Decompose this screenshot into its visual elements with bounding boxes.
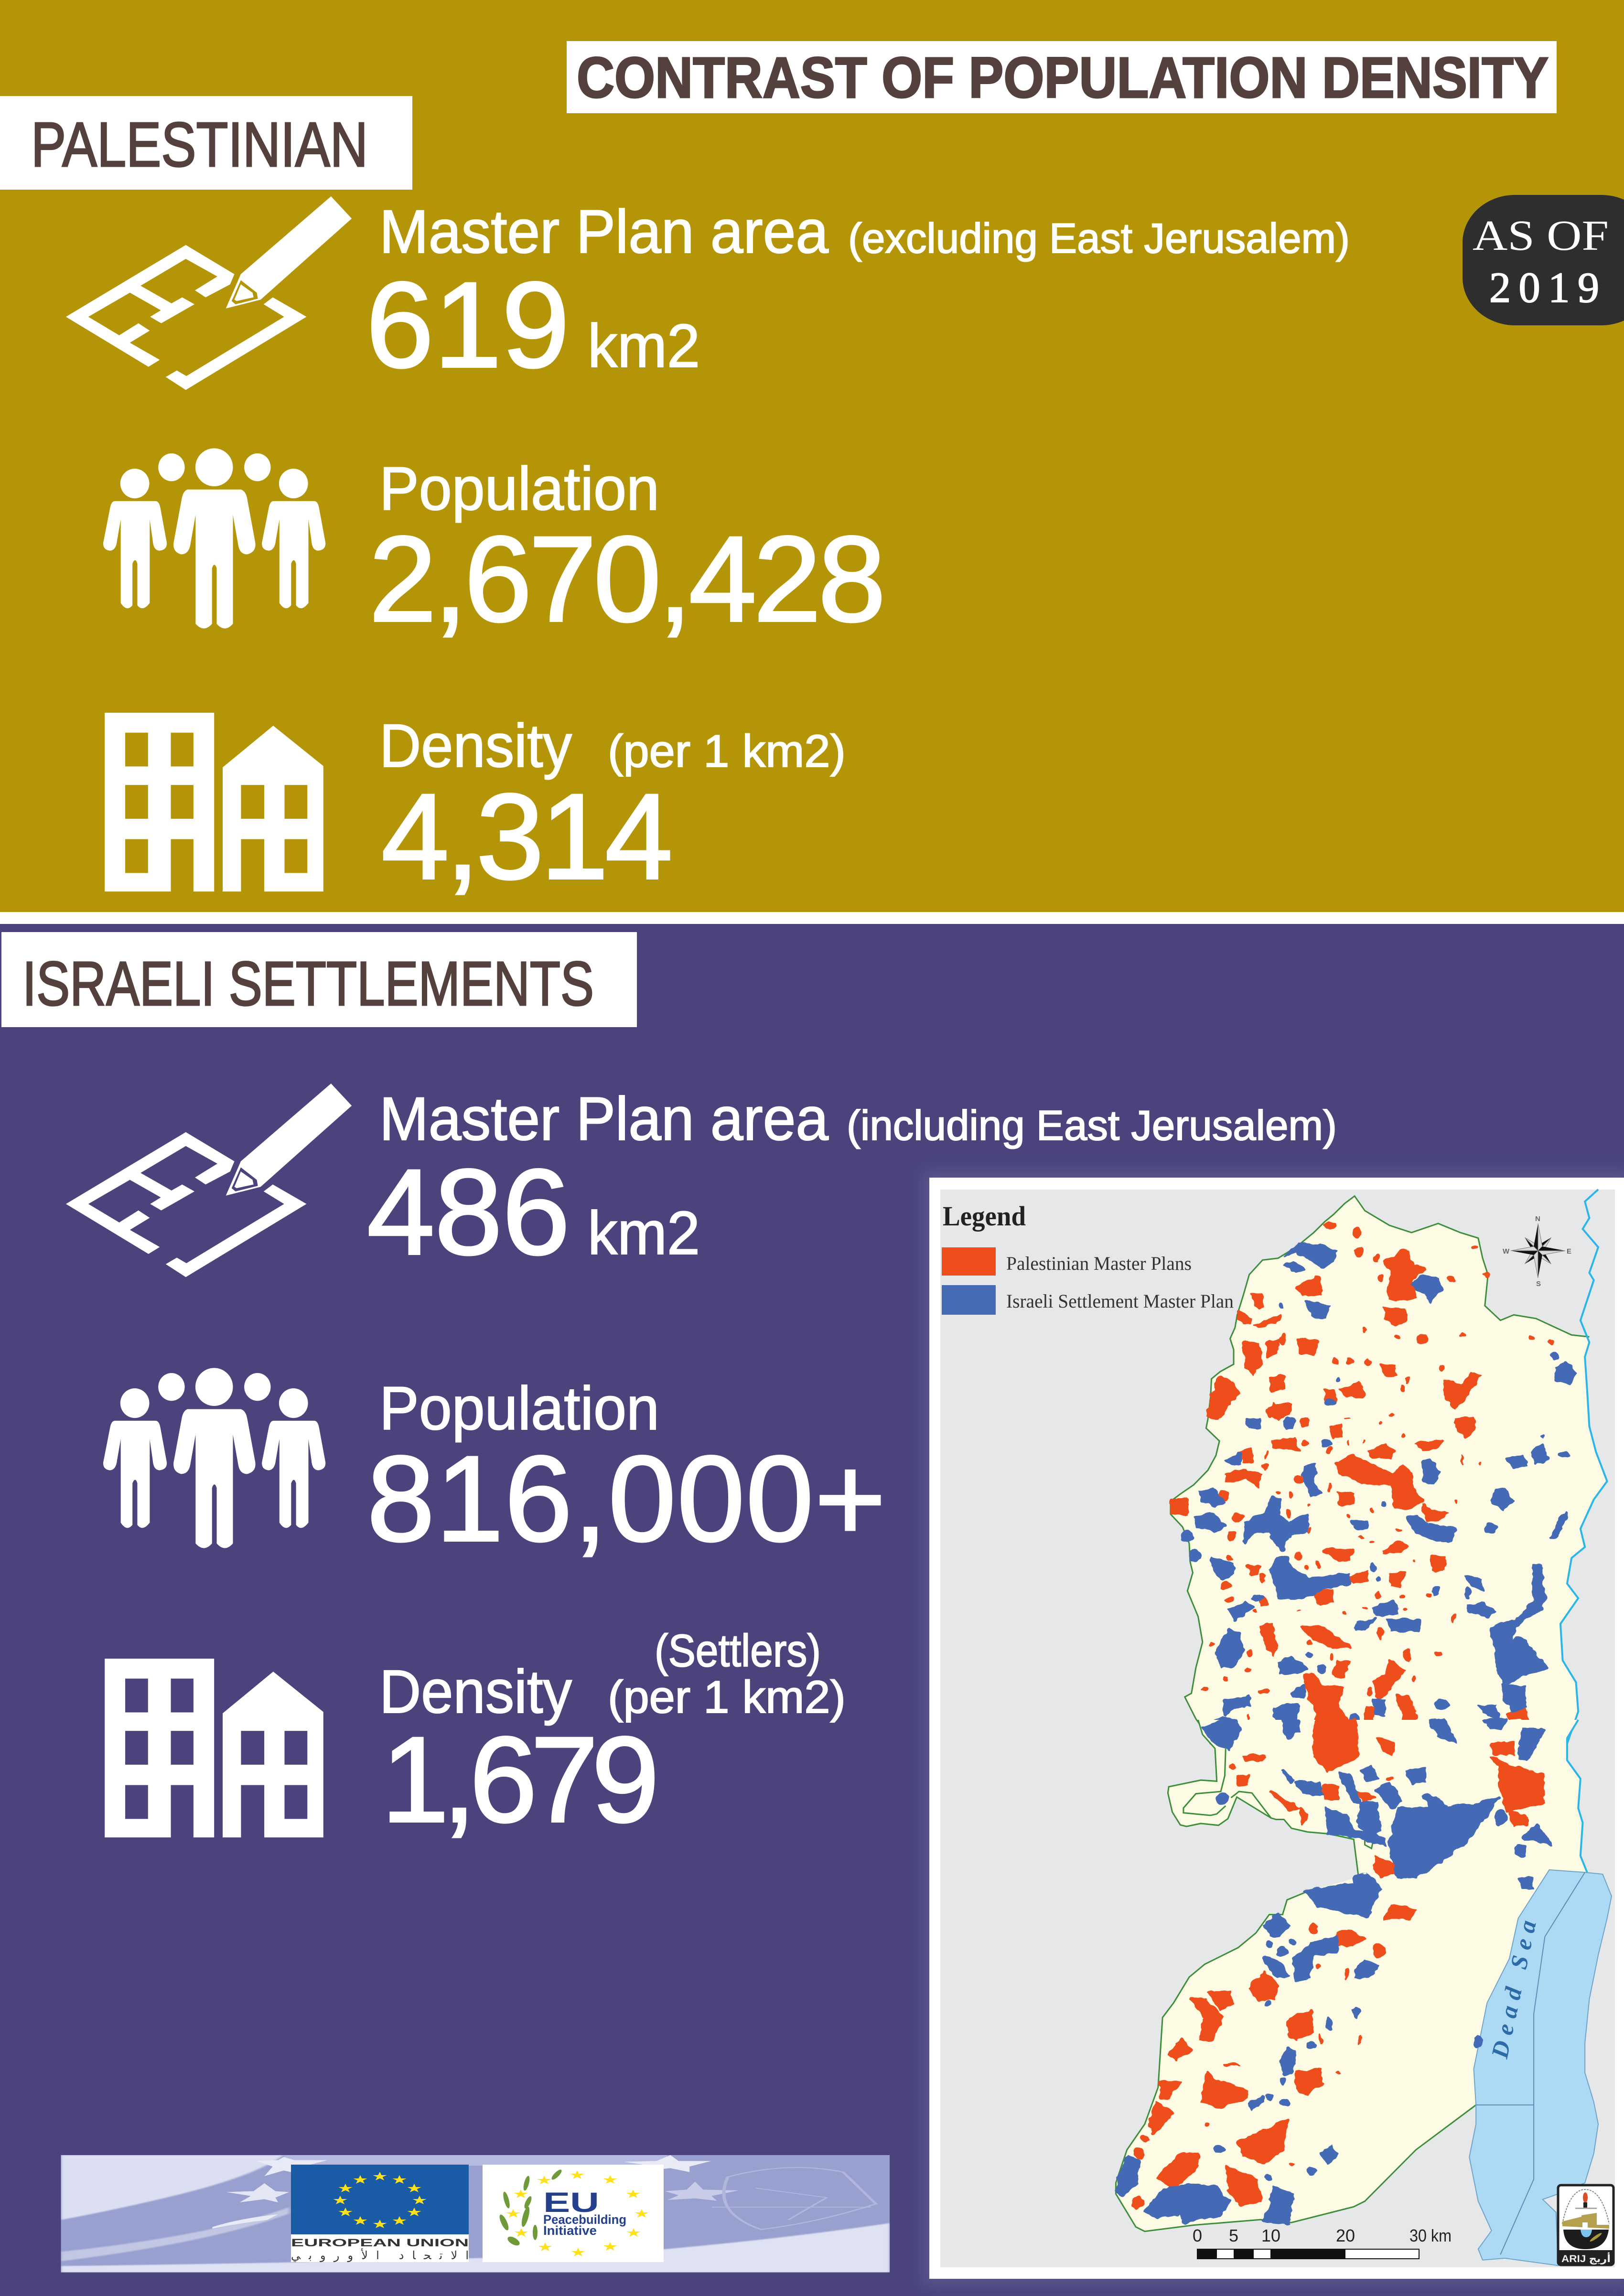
badge: as of 2019 <box>1463 195 1624 325</box>
number: 816,000+: 816,000+ <box>367 1431 886 1567</box>
text: density settlers: (per 1 km2) <box>608 1672 846 1723</box>
icon: buildings <box>105 713 323 891</box>
icon: floor plan and pencil <box>66 196 352 390</box>
text: master plan area: (including East Jerusalem) <box>847 1102 1337 1149</box>
legend: Legend <box>943 1201 1026 1232</box>
text: density: (per 1 km2) <box>608 726 846 777</box>
badge: as of 2019: AS OF <box>1473 212 1609 259</box>
icon: compass rose <box>1503 1215 1571 1288</box>
heading: Israeli settlements <box>1 932 637 1027</box>
scale bar: 10 <box>1261 2226 1280 2245</box>
badge: as of 2019: 2019 <box>1489 264 1599 311</box>
number: 2,670,428: 2,670,428 <box>369 511 886 647</box>
icon: compass rose: N <box>1535 1215 1540 1223</box>
footer banner <box>61 2155 890 2273</box>
logo: European Union: EUROPEAN UNION <box>291 2237 469 2249</box>
scale bar: 20 <box>1336 2226 1355 2245</box>
scale bar: 30 km <box>1409 2226 1452 2245</box>
icon: buildings <box>105 1659 323 1837</box>
panel: Palestinian <box>0 0 1624 912</box>
logo: EU Peacebuilding Initiative: EU <box>543 2187 599 2218</box>
map: southern West Bank and Dead Sea <box>1116 1720 1612 2265</box>
logo: ARIJ: ARIJ أريج <box>1561 2252 1611 2264</box>
number: 619 km2 <box>366 257 700 393</box>
logo: EU Peacebuilding Initiative <box>483 2165 664 2262</box>
icon: floor plan and pencil <box>66 1084 352 1277</box>
heading: Palestinian: PALESTINIAN <box>31 109 368 180</box>
text: population: Population <box>379 455 659 523</box>
text: master plan area <box>379 1085 1337 1153</box>
text: density settlers <box>379 1625 846 1726</box>
text: density <box>379 712 846 780</box>
text: master plan area: Master Plan area <box>379 1085 829 1153</box>
panel: map <box>922 1170 1624 2286</box>
text: master plan area <box>379 198 1350 266</box>
icon: compass rose: E <box>1567 1247 1571 1255</box>
heading: Israeli settlements: ISRAELI SETTLEMENTS <box>22 948 594 1019</box>
logo: European Union <box>291 2165 469 2262</box>
text: master plan area: (excluding East Jerusalem) <box>848 215 1350 262</box>
label: Dead Sea: Dead Sea <box>1486 1911 1543 2061</box>
divider band <box>0 912 1624 924</box>
legend: Palestinian Master Plans <box>1006 1253 1192 1274</box>
title: CONTRAST OF POPULATION DENSITY <box>577 45 1549 110</box>
logo: EU Peacebuilding Initiative: Peacebuilding <box>543 2212 626 2227</box>
text: density settlers: (Settlers) <box>655 1625 821 1676</box>
text: density settlers: Density <box>379 1658 572 1726</box>
text: master plan area: Master Plan area <box>379 198 829 266</box>
number: 486 km2: km2 <box>588 1199 700 1267</box>
panel: Israeli settlements <box>1 932 1337 1848</box>
number: 619 km2: km2 <box>588 312 700 380</box>
scale bar: 5 <box>1229 2226 1238 2245</box>
text: population: Population <box>379 1374 659 1443</box>
icon: compass rose: S <box>1536 1280 1541 1288</box>
legend: Israeli Settlement Master Plan <box>1006 1290 1234 1312</box>
icon: people <box>103 448 325 628</box>
map: northern West Bank <box>1171 1190 1607 1744</box>
heading: Palestinian <box>0 96 412 190</box>
scale bar: 0 <box>1193 2226 1202 2245</box>
logo: ARIJ <box>1558 2185 1613 2265</box>
logo: European Union: الاتحاد الأوروبي <box>291 2248 469 2262</box>
legend <box>942 1201 1234 1315</box>
logo: EU Peacebuilding Initiative: Initiative <box>543 2223 597 2238</box>
icon: people <box>103 1368 325 1548</box>
text: density: Density <box>379 712 572 780</box>
number: 486 km2: 486 <box>367 1144 570 1280</box>
number: 619 km2: 619 <box>366 257 570 393</box>
icon: compass rose: W <box>1503 1247 1510 1255</box>
number: 486 km2 <box>367 1144 700 1280</box>
number: 1,679: 1,679 <box>381 1712 659 1848</box>
map: Dead Sea <box>1469 1870 1612 2265</box>
scale bar <box>1193 2226 1452 2259</box>
number: 4,314: 4,314 <box>381 769 673 905</box>
